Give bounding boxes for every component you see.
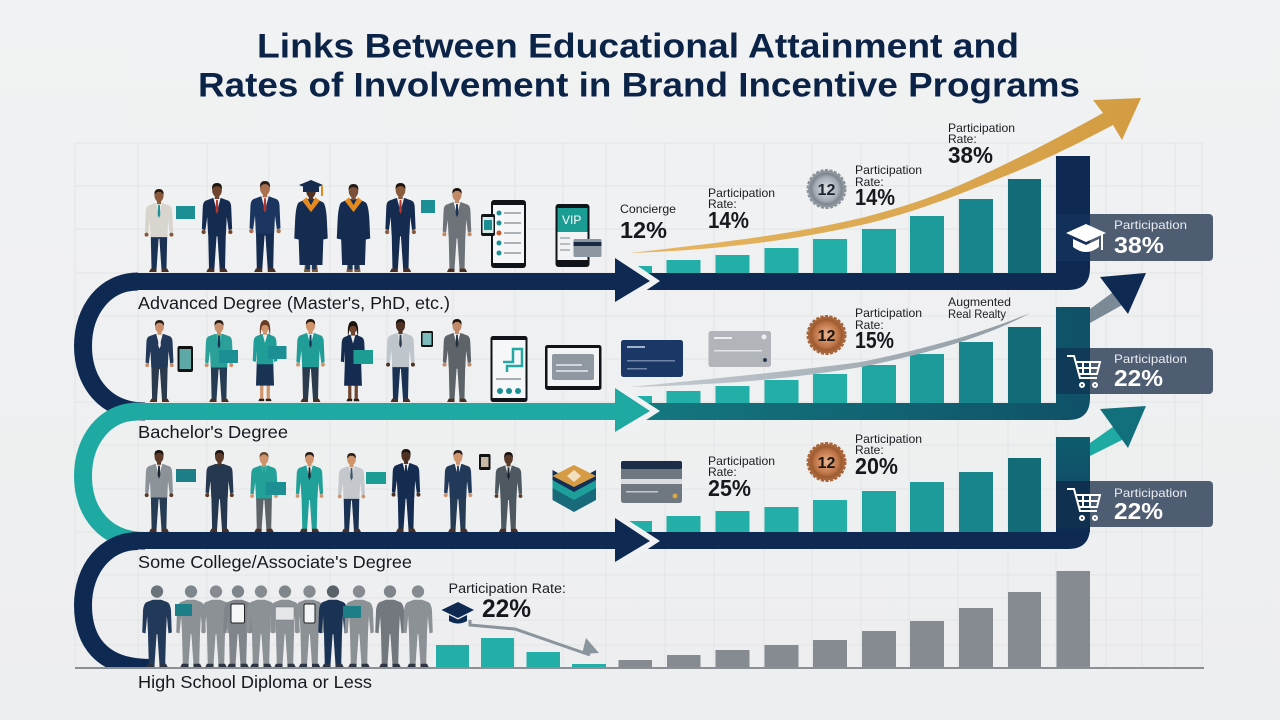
navy person: [318, 585, 348, 667]
people: some college row: [145, 449, 522, 532]
row label: bachelor's: Bachelor's Degree: [138, 422, 288, 442]
ribbon 2: teal band, arrow and riser: [138, 307, 1090, 437]
arrow: declining grey: [470, 620, 599, 655]
annotation: 14%: 14%: [708, 207, 749, 233]
annotation: 15%: 15%: [855, 327, 894, 353]
icon: graduation cap white: [1066, 224, 1106, 252]
annotation: 38%: 38%: [948, 142, 993, 168]
title: Links Between Educational Attainment and: [257, 28, 1019, 66]
card: [175, 604, 192, 616]
woman with card: [341, 321, 373, 401]
annotation: augmented reality: Augmented: [948, 295, 1011, 309]
icon: shopping cart: [1067, 356, 1100, 387]
badge: silver 12: [808, 170, 845, 208]
grey person: [344, 585, 374, 667]
annotation: 14%: Participation: [855, 163, 922, 177]
tablet: [231, 604, 244, 623]
annotation: 20%: Participation: [855, 432, 922, 446]
annotation: 20%: 20%: [855, 453, 898, 479]
ribbon 1: navy band, arrow and riser: [138, 156, 1090, 308]
grey person: [403, 585, 433, 667]
credit card: navy: [621, 340, 683, 377]
annotation: 38%: Participation: [948, 121, 1015, 135]
person teal jacket: [296, 319, 325, 402]
annotation: 25%: Participation: [708, 454, 775, 468]
graduate: [337, 184, 370, 272]
grey person: [176, 585, 206, 667]
annotation: high school 22%: Participation Rate:: [448, 581, 566, 596]
callout: bachelor's 22%: 22%: [1114, 365, 1163, 391]
badge: bronze 12: [808, 444, 845, 480]
woman with card: [250, 452, 286, 532]
grey person: [246, 585, 276, 667]
annotation: 14%: [855, 163, 922, 210]
icon: graduation cap navy: [442, 602, 474, 624]
row label: some college: Some College/Associate's Degree: [138, 552, 412, 572]
arrow: grey swoosh: [630, 313, 1030, 387]
icon: layered stack: [552, 465, 596, 512]
bar chart: some college: [629, 458, 1041, 533]
card: [343, 606, 361, 618]
device: tablet app: [490, 336, 528, 402]
annotation: 25%: Rate:: [708, 465, 737, 479]
person with card: [145, 450, 196, 532]
credit card: dark grey: [621, 461, 682, 503]
annotation: 25%: 25%: [708, 475, 751, 501]
bar chart: high school: [436, 571, 1090, 667]
callout: bachelor's 22%: Participation: [1114, 352, 1187, 366]
two people exchanging tablet: [444, 450, 522, 532]
person grey suit: [443, 319, 471, 402]
card: [276, 607, 294, 620]
person navy suit: [392, 449, 420, 532]
icon: shopping cart: [1067, 489, 1100, 520]
title: Rates of Involvement in Brand Incentive Programs: [198, 66, 1080, 104]
device: app phone: [481, 200, 526, 268]
ribbon: navy curve from advanced degree to bachelor's: [83, 282, 145, 412]
annotation: 14%: 14%: [855, 184, 895, 210]
row label: high school: High School Diploma or Less: [138, 672, 372, 692]
annotation: 20%: Rate:: [855, 443, 884, 457]
bar chart: advanced degree: [636, 179, 1041, 273]
annotation: 15%: Participation: [855, 306, 922, 320]
callout: advanced 38%: [1056, 214, 1213, 261]
grey person: [295, 585, 324, 667]
annotation: 14%: Participation: [708, 186, 775, 200]
badge: bronze 12: 12: [818, 328, 836, 345]
person with card: [338, 453, 386, 532]
person with phone: [145, 320, 193, 402]
ribbon: teal curve from bachelor's to some college: [83, 412, 145, 541]
annotation: 14%: [708, 186, 775, 233]
arrow: row 3 upward: [1090, 406, 1146, 456]
badge: bronze 12: 12: [818, 455, 836, 472]
badge: bronze 12: [808, 316, 845, 354]
woman with card: [253, 320, 286, 401]
annotation: 25%: [708, 454, 775, 501]
device: VIP phone with card: [556, 204, 602, 267]
device: VIP phone with card: VIP: [562, 213, 581, 227]
graduate with cap: [294, 180, 328, 272]
callout: advanced 38%: Participation: [1114, 218, 1187, 232]
annotation: augmented reality: Real Realty: [948, 307, 1006, 321]
bar chart: bachelor's degree: [636, 327, 1041, 403]
arrow: row 2 upward: [1090, 273, 1146, 323]
ribbon 3: navy band, arrow and riser: [138, 437, 1090, 567]
people: high school crowd: [142, 585, 433, 667]
annotation: concierge 12%: Concierge: [620, 202, 676, 216]
person dark: [205, 450, 234, 532]
person suit: [249, 181, 281, 272]
grey person: [375, 585, 405, 667]
annotation: concierge 12%: 12%: [620, 217, 667, 243]
grey person: [223, 585, 253, 667]
annotation: 38%: [948, 121, 1015, 168]
people: advanced degree row: [145, 180, 472, 272]
title: [198, 28, 1080, 104]
callout: bachelor's 22%: [1056, 348, 1213, 394]
callout: advanced 38%: 38%: [1114, 232, 1164, 258]
person grey suit: [442, 188, 472, 272]
annotation: 14%: Rate:: [708, 197, 737, 211]
person with card: [385, 183, 435, 272]
baseline axis: [75, 667, 1204, 669]
credit card: silver: [708, 331, 771, 367]
annotation: concierge 12%: [620, 202, 676, 243]
annotation: 15%: Rate:: [855, 318, 884, 332]
annotation: 15%: [855, 306, 922, 353]
person suit: [202, 183, 232, 272]
grey person: [270, 585, 300, 667]
annotation: high school 22%: 22%: [482, 595, 531, 623]
annotation: 38%: Rate:: [948, 132, 977, 146]
badge: silver 12: 12: [818, 182, 836, 199]
callout: some college 22%: 22%: [1114, 498, 1163, 524]
annotation: 14%: Rate:: [855, 175, 884, 189]
annotation: high school 22%: [448, 581, 566, 623]
person with tablet: [386, 319, 433, 402]
arrow: gold growth arrow: [631, 98, 1141, 253]
woman teal suit: [296, 452, 323, 532]
callout: some college 22%: [1056, 481, 1213, 527]
row label: advanced degree: Advanced Degree (Master's, PhD, etc.): [138, 293, 450, 313]
person with card: [145, 189, 195, 272]
navy person: [142, 585, 172, 667]
annotation: augmented reality: [948, 295, 1011, 321]
ribbon: navy curve from some college to high school: [83, 541, 150, 668]
person with card: [205, 320, 238, 402]
tablet: [304, 604, 315, 623]
annotation: 20%: [855, 432, 922, 479]
people: bachelor's row: [145, 319, 471, 402]
device: landscape tablet: [545, 345, 602, 390]
grey person: [201, 585, 231, 667]
callout: some college 22%: Participation: [1114, 486, 1187, 500]
